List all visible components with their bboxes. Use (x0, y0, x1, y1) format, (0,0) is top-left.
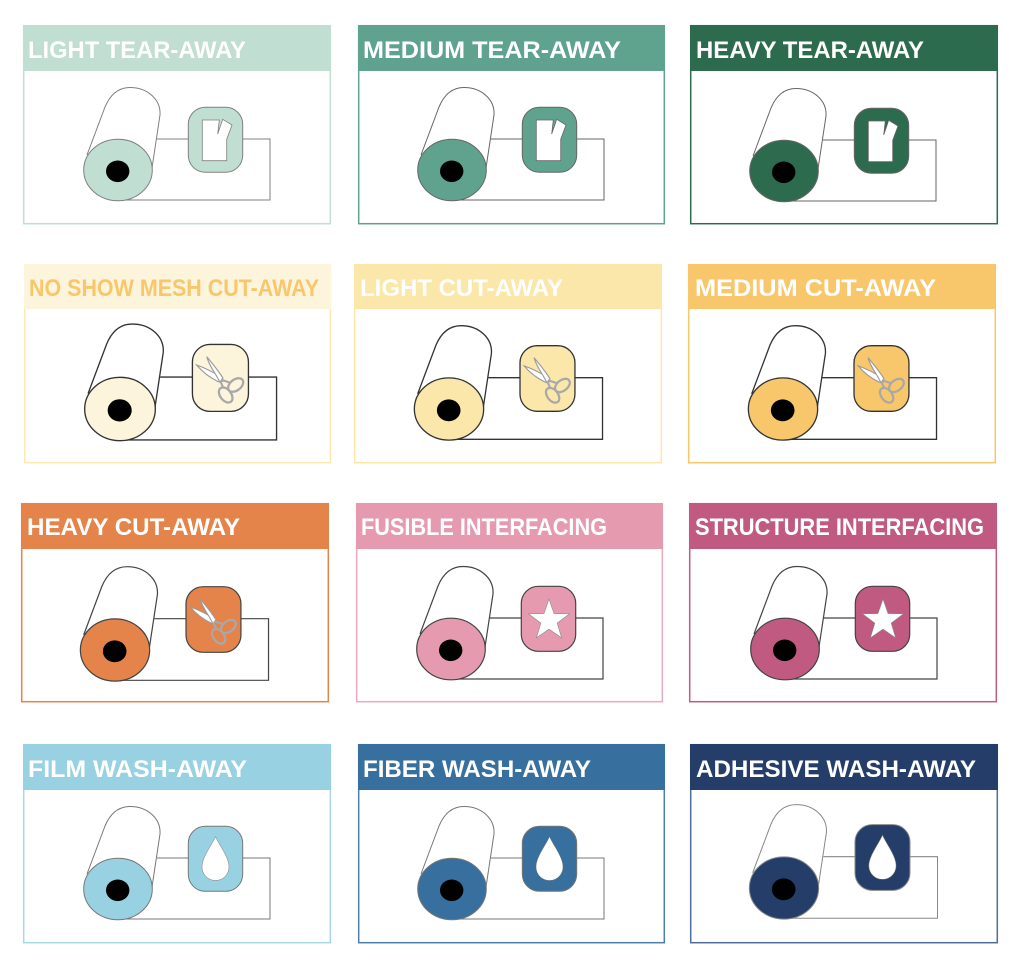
header: light tear-away (23, 25, 331, 71)
heading: light cut-away: LIGHT CUT-AWAY (360, 275, 563, 302)
panel: fusible interfacing (356, 503, 663, 702)
panel: light tear-away (23, 25, 331, 224)
header: structure interfacing (689, 503, 997, 549)
heading: adhesive wash-away: ADHESIVE WASH-AWAY (696, 756, 976, 783)
heading: medium tear-away: MEDIUM TEAR-AWAY (363, 37, 621, 64)
panel: structure interfacing (689, 503, 997, 702)
header: heavy cut-away (21, 503, 329, 549)
panel: light cut-away (354, 264, 662, 463)
icon: roll with scissors (414, 326, 603, 440)
panel: heavy cut-away (21, 503, 329, 702)
heading: fusible interfacing: FUSIBLE INTERFACING (361, 514, 607, 541)
panel: heavy tear-away (690, 25, 998, 224)
header: film wash-away (23, 744, 331, 790)
panel: fiber wash-away (358, 744, 665, 943)
icon: roll with torn pattern (750, 88, 936, 202)
panel: medium cut-away (688, 264, 996, 463)
header: fiber wash-away (358, 744, 665, 790)
icon: roll with scissors (748, 326, 937, 440)
heading: medium cut-away: MEDIUM CUT-AWAY (695, 275, 936, 302)
panel: medium tear-away (358, 25, 665, 224)
header: adhesive wash-away (690, 744, 998, 790)
heading: heavy tear-away: HEAVY TEAR-AWAY (696, 37, 924, 64)
heading: structure interfacing: STRUCTURE INTERFACING (695, 514, 984, 541)
icon: roll with star (751, 566, 937, 680)
panel: film wash-away (23, 744, 331, 943)
header: no show mesh cut-away (24, 264, 331, 309)
header: medium cut-away (688, 264, 996, 309)
icon: roll with torn pattern (84, 88, 270, 201)
panel: adhesive wash-away (690, 744, 998, 943)
heading: fiber wash-away: FIBER WASH-AWAY (363, 756, 591, 783)
header: fusible interfacing (356, 503, 663, 549)
icon: roll with star (417, 566, 603, 680)
icon: roll with water drop (749, 805, 938, 919)
heading: light tear-away: LIGHT TEAR-AWAY (28, 37, 246, 64)
header: medium tear-away (358, 25, 665, 71)
panel: no show mesh cut-away (24, 264, 331, 463)
heading: heavy cut-away: HEAVY CUT-AWAY (27, 514, 240, 541)
heading: film wash-away: FILM WASH-AWAY (28, 756, 247, 783)
header: heavy tear-away (690, 25, 998, 71)
icon: roll with water drop (418, 806, 604, 920)
icon: roll with water drop (84, 806, 270, 920)
header: light cut-away (354, 264, 662, 309)
icon: roll with torn pattern (418, 88, 604, 201)
icon: roll with scissors (85, 324, 277, 441)
heading: no show mesh cut-away: NO SHOW MESH CUT-AWAY (29, 275, 319, 302)
icon: roll with scissors (80, 567, 269, 681)
